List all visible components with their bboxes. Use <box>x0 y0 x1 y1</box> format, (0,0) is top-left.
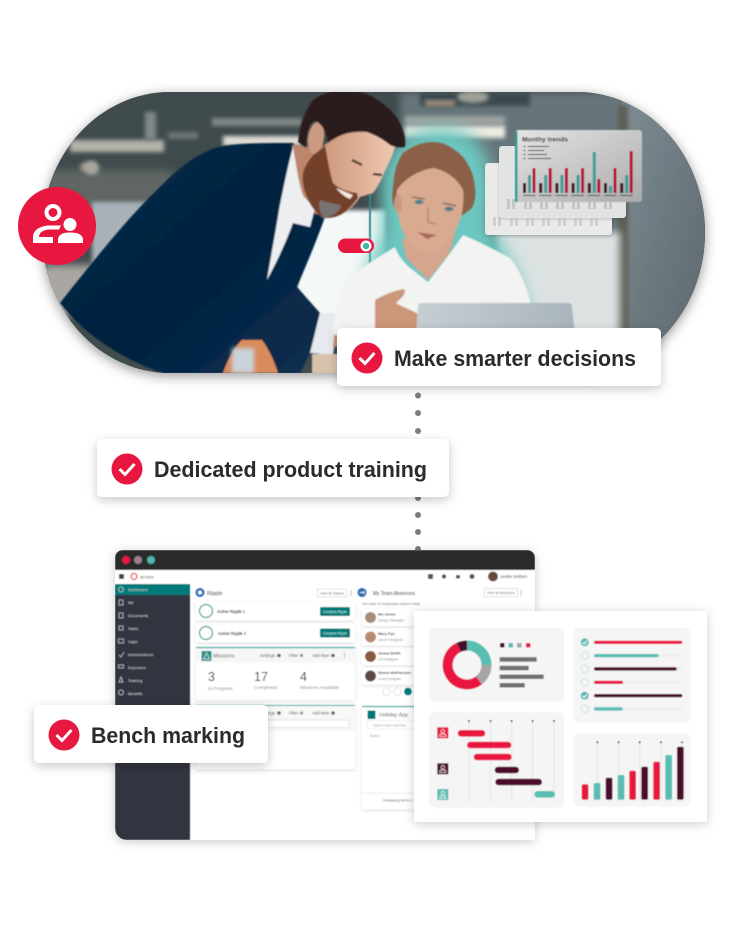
panel: task checklist <box>574 628 690 723</box>
legend text bars <box>500 657 544 688</box>
second missions panel: Settings <box>260 710 275 716</box>
missions panel: In Progress <box>208 686 233 692</box>
shirt <box>333 235 533 335</box>
bars <box>582 747 684 800</box>
dotted connector <box>415 392 421 552</box>
second missions panel: Filter <box>289 710 299 716</box>
second missions panel <box>196 705 355 769</box>
app top bar <box>115 570 535 584</box>
missions panel: Add New <box>312 653 330 658</box>
holiday app panel: Button <box>370 734 380 738</box>
ripple section <box>196 588 355 642</box>
eyes <box>414 200 424 204</box>
second missions panel: Add New <box>312 710 330 716</box>
middle card <box>499 146 626 218</box>
progress tracks <box>594 641 682 711</box>
floating chart cards <box>485 130 642 235</box>
hair <box>298 91 405 148</box>
gantt gridlines <box>468 721 554 802</box>
person rows: Design Manager <box>378 618 405 622</box>
sidebar: Authorisations <box>128 652 153 657</box>
panel: bar chart <box>574 733 690 807</box>
callout: Make smarter decisions <box>337 328 661 386</box>
bottom objects <box>223 340 278 373</box>
team absences section <box>358 588 522 695</box>
team absences section: You have 10 employees absent today <box>362 602 420 606</box>
holiday app panel: Search team member... <box>373 724 408 728</box>
sidebar: Tasks <box>128 626 138 631</box>
face <box>318 130 396 220</box>
callout text: Make smarter decisions <box>394 346 636 371</box>
team absences section: View all Absences <box>487 591 515 595</box>
callout: Bench marking <box>34 705 268 763</box>
ripple section: Active Ripple 1 <box>217 609 246 614</box>
hand gesture <box>375 289 418 332</box>
face <box>396 168 463 253</box>
bars <box>523 151 633 196</box>
chart legend lines <box>524 146 551 159</box>
sleeve cuff <box>310 313 339 355</box>
dashboard overlay card <box>414 611 707 822</box>
sidebar <box>115 584 190 840</box>
missions panel: 3 <box>208 670 215 684</box>
person rows: Simon McPherson <box>378 671 412 675</box>
sidebar: Benefits <box>128 691 142 696</box>
jacket <box>60 143 325 373</box>
missions panel: Settings <box>260 653 275 658</box>
panel: donut chart <box>429 628 564 702</box>
person rows: UX Designer <box>378 658 399 662</box>
callout: Dedicated product training <box>97 439 449 497</box>
sidebar: Gaps <box>128 639 138 644</box>
blurred office background <box>42 91 712 373</box>
icon: people in red circle <box>18 187 96 265</box>
sidebar: Me <box>128 600 134 605</box>
ripple section: Complete Ripple <box>323 610 347 614</box>
person rows <box>362 609 417 684</box>
gantt bars <box>458 730 555 798</box>
check circles <box>581 638 589 713</box>
missions panel: 17 <box>254 670 268 684</box>
missions panel <box>196 647 355 700</box>
panel: gantt chart <box>429 712 564 808</box>
back card <box>485 163 612 235</box>
teal glow behind woman <box>352 129 530 335</box>
holiday app panel: Displaying Items 1 - <box>383 798 415 802</box>
missions panel: Missions Available <box>300 685 339 691</box>
ripple section: Complete Ripple <box>323 631 347 635</box>
hand <box>332 334 337 348</box>
woman <box>333 142 575 335</box>
chart title: Monthy trends <box>522 136 568 144</box>
hair <box>392 142 475 215</box>
toggle switch <box>338 238 374 253</box>
missions panel: Filter <box>289 653 299 658</box>
ear <box>306 121 326 155</box>
mouth and nose <box>417 232 437 239</box>
callout text: Bench marking <box>91 723 245 748</box>
photo pill: two colleagues reviewing a laptop <box>42 91 712 374</box>
app window screenshot <box>115 550 535 840</box>
donut legend <box>500 643 530 648</box>
sidebar: Expenses <box>128 665 146 670</box>
person rows: Ian Jones <box>378 612 396 616</box>
sidebar: Documents <box>128 613 148 618</box>
ripple section: View all Ripples <box>320 592 344 596</box>
sidebar: Training <box>128 678 142 683</box>
app top bar: Jennifer Smithers <box>500 574 527 579</box>
missions panel: 4 <box>300 670 307 684</box>
pagination <box>383 688 412 695</box>
callout text: Dedicated product training <box>154 457 427 482</box>
person rows: Lead Designer <box>378 677 402 681</box>
laptop <box>416 302 575 328</box>
missions panel: Missions <box>213 654 235 660</box>
person rows: Jenna Smith <box>378 652 401 656</box>
holiday app panel <box>362 706 432 809</box>
neck <box>292 145 320 215</box>
holiday app panel: Holiday App <box>379 712 408 718</box>
donut <box>448 646 487 684</box>
person rows: Junior Designer <box>378 638 404 642</box>
gridlines <box>597 742 682 799</box>
sidebar: Dashboard <box>128 587 148 592</box>
progress bars <box>594 641 682 711</box>
person icons <box>437 727 448 800</box>
icon: check <box>48 720 80 750</box>
ripple section: Active Ripple 2 <box>218 631 247 636</box>
beard <box>303 145 358 218</box>
man <box>60 91 416 374</box>
person rows: Mary Pye <box>378 632 395 636</box>
window title bar <box>115 550 535 570</box>
app top bar: access <box>140 574 155 580</box>
icon: check <box>352 342 382 374</box>
missions panel: Completed <box>254 685 278 691</box>
front card: Monthly trends chart <box>515 130 642 202</box>
eyes and mouth <box>352 160 382 175</box>
ripple section: Ripple <box>207 591 223 597</box>
team absences section: My Team Absences <box>373 591 415 597</box>
shirt <box>267 147 315 280</box>
icon: check <box>112 454 142 484</box>
